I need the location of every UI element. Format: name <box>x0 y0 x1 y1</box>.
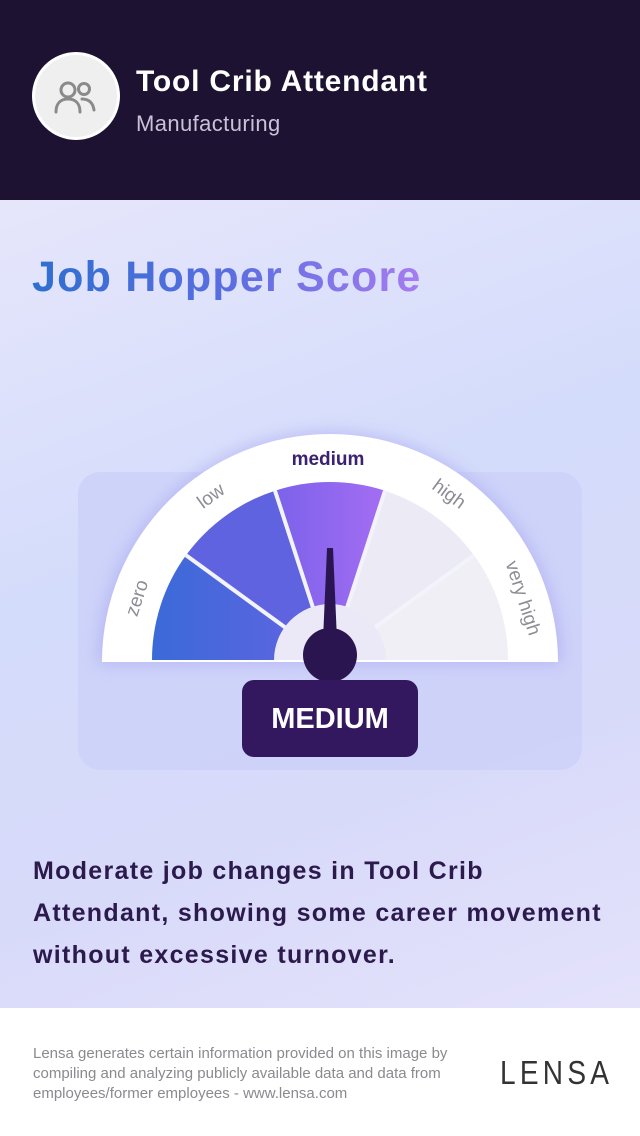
industry: Manufacturing <box>136 111 281 136</box>
description: without excessive turnover. <box>33 941 396 969</box>
labels: medium <box>292 449 364 470</box>
avatar icon <box>32 52 120 140</box>
needle <box>303 548 357 682</box>
disclaimer: Lensa generates certain information provided on this image by <box>33 1045 447 1062</box>
job title: Tool Crib Attendant <box>136 65 428 98</box>
footer <box>0 1008 640 1136</box>
labels <box>122 449 544 638</box>
labels: high <box>428 475 469 513</box>
description: Moderate job changes in Tool Crib <box>33 857 484 885</box>
disclaimer: compiling and analyzing publicly available data and data from <box>33 1065 441 1082</box>
labels: very high <box>501 558 544 638</box>
heading: Job Hopper Score <box>32 253 422 301</box>
gauge <box>94 426 566 680</box>
badge <box>242 680 418 757</box>
disclaimer <box>33 1045 448 1102</box>
badge: MEDIUM <box>271 703 389 735</box>
main panel <box>0 200 640 1008</box>
disclaimer: employees/former employees - www.lensa.com <box>33 1085 347 1102</box>
logo: LENSA <box>500 1054 613 1091</box>
labels: low <box>194 479 229 513</box>
gauge card <box>78 472 582 770</box>
description: Attendant, showing some career movement <box>33 899 602 927</box>
header <box>0 0 640 200</box>
hub <box>274 604 386 660</box>
labels: zero <box>122 577 153 619</box>
description <box>33 857 602 969</box>
segments <box>152 482 508 660</box>
outer white band <box>102 434 558 662</box>
